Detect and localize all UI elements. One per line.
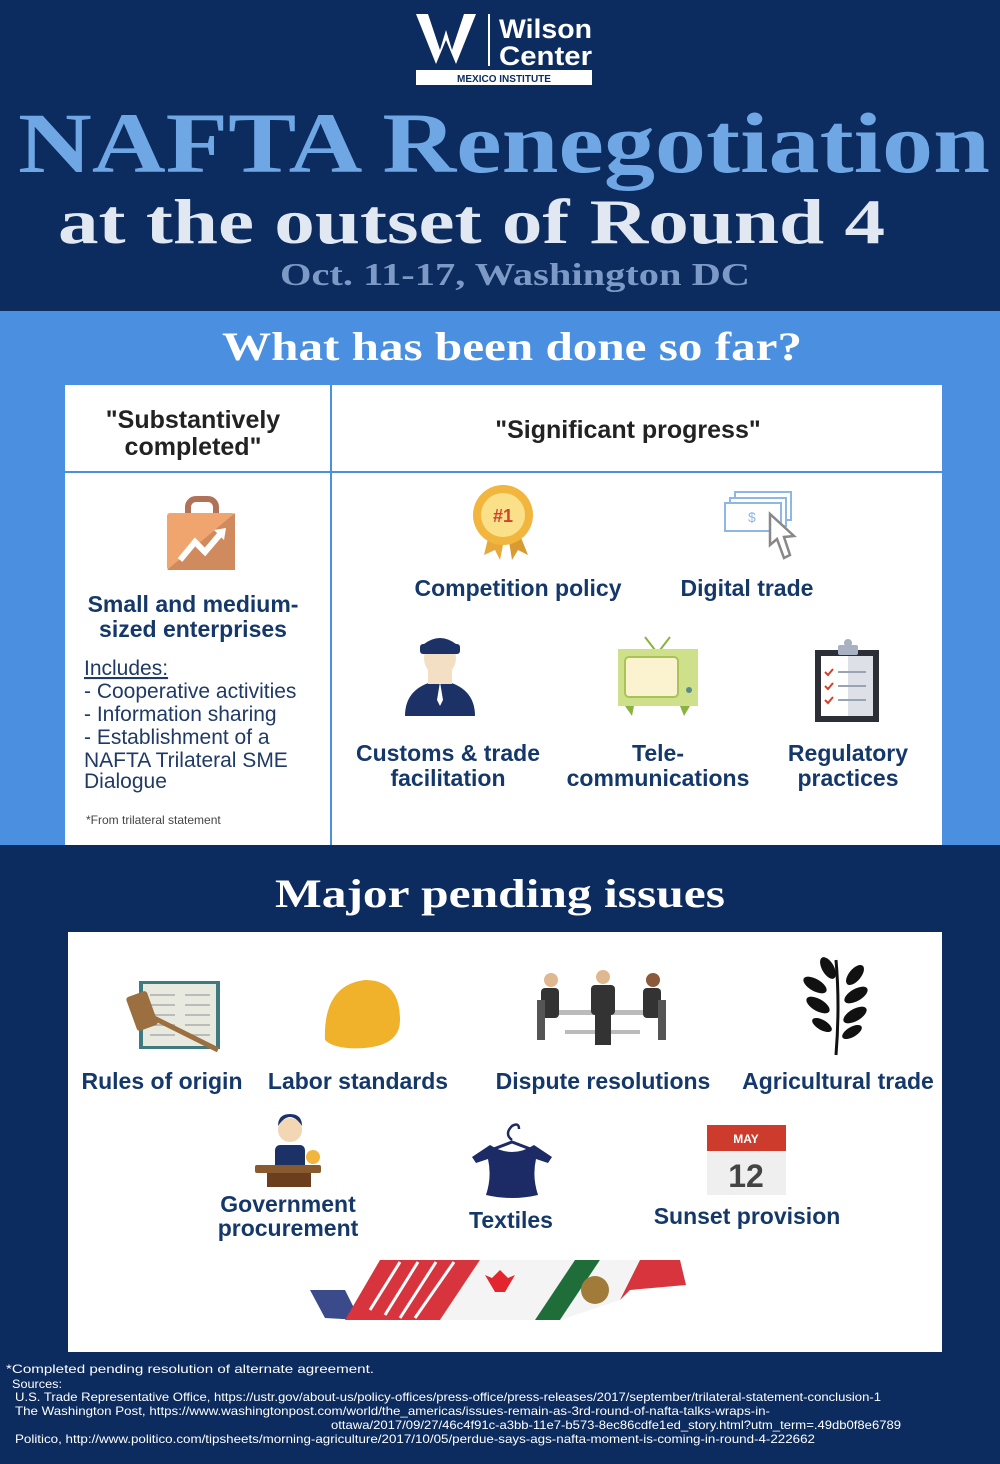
label: rules of origin: Rules of origin bbox=[82, 1068, 242, 1094]
footer: notes and sources: Sources: bbox=[12, 1377, 62, 1391]
logo: Wilson Center Mexico Institute: MEXICO INSTITUTE bbox=[457, 74, 551, 85]
label: sunset provision: Sunset provision bbox=[654, 1203, 840, 1229]
icon: meeting bbox=[537, 970, 666, 1045]
icon: hard hat bbox=[325, 980, 400, 1048]
footer: notes and sources: U.S. Trade Representative Office, https://ustr.gov/about-us/policy-offices/press-office/press-releases/2017/september/trilateral-statement-conclusion-1 bbox=[15, 1390, 881, 1404]
header: substantively completed: "Substantively bbox=[106, 406, 280, 434]
icon: briefcase bbox=[167, 499, 235, 570]
icon: digital money bbox=[725, 492, 794, 558]
label: textiles: Textiles bbox=[469, 1207, 553, 1233]
label: digital trade: Digital trade bbox=[681, 575, 813, 601]
icon: medal bbox=[473, 485, 533, 560]
text block: includes list: - Cooperative activities bbox=[84, 680, 296, 703]
label: government procurement: procurement bbox=[218, 1215, 359, 1241]
icon: plant bbox=[801, 955, 870, 1055]
panel: progress table bbox=[65, 385, 942, 845]
text block: includes list: Includes: bbox=[84, 657, 168, 680]
label: telecommunications: communications bbox=[567, 765, 749, 791]
label: regulatory practices: practices bbox=[797, 765, 899, 791]
icon: shirt on hanger bbox=[472, 1125, 552, 1198]
icon: medal: #1 bbox=[493, 506, 513, 526]
footer: notes and sources: The Washington Post, https://www.washingtonpost.com/world/the_americas/issues-remain-as-3rd-round-of-nafta-talks-wraps-in- bbox=[15, 1404, 770, 1418]
icon: clipboard bbox=[815, 639, 879, 722]
text block: includes list: - Information sharing bbox=[84, 703, 277, 726]
logo: Wilson Center Mexico Institute bbox=[416, 14, 593, 85]
footer: notes and sources: ottawa/2017/09/27/46c4f91c-a3bb-11e7-b573-8ec86cdfe1ed_story.html?utm_term=.49db0f8e6789 bbox=[331, 1418, 901, 1432]
icon: television bbox=[618, 637, 698, 716]
footer: notes and sources: Politico, http://www.politico.com/tipsheets/morning-agriculture/2017/10/05/perdue-says-ags-nafta-moment-is-coming-in-round-4-222662 bbox=[15, 1432, 815, 1446]
note: *From trilateral statement bbox=[86, 813, 221, 827]
icon: book and gavel bbox=[126, 981, 220, 1050]
logo: Wilson Center Mexico Institute: Center bbox=[499, 41, 593, 71]
footer: notes and sources: *Completed pending resolution of alternate agreement. bbox=[6, 1362, 374, 1376]
panel: pending issues bbox=[68, 932, 942, 1352]
label: labor standards: Labor standards bbox=[268, 1068, 448, 1094]
heading: major pending issues: Major pending issues bbox=[275, 871, 725, 916]
label: government procurement: Government bbox=[220, 1191, 356, 1217]
icon: calendar: MAY bbox=[733, 1132, 759, 1146]
label: competition policy: Competition policy bbox=[414, 575, 622, 601]
icon: podium speaker bbox=[255, 1114, 321, 1187]
icon: calendar bbox=[707, 1125, 786, 1195]
label: customs & trade facilitation: Customs & trade bbox=[356, 740, 540, 766]
text block: includes list: Dialogue bbox=[84, 770, 167, 793]
label: customs & trade facilitation: facilitation bbox=[390, 765, 506, 791]
icon: calendar: 12 bbox=[728, 1158, 764, 1194]
label: regulatory practices: Regulatory bbox=[788, 740, 908, 766]
date: Oct. 11-17, Washington DC bbox=[280, 256, 750, 292]
icon: flags ribbon bbox=[310, 1260, 686, 1320]
label: dispute resolutions: Dispute resolutions bbox=[496, 1068, 710, 1094]
subtitle: at the outset of Round 4 bbox=[58, 186, 885, 257]
heading: what has been done: What has been done so far? bbox=[222, 324, 802, 369]
text block: includes list: NAFTA Trilateral SME bbox=[84, 749, 288, 772]
logo: Wilson Center Mexico Institute: Wilson bbox=[499, 14, 592, 44]
header: significant progress: "Significant progress" bbox=[495, 416, 761, 444]
label: telecommunications: Tele- bbox=[632, 740, 684, 766]
text block: includes list: - Establishment of a bbox=[84, 726, 270, 749]
footer: notes and sources bbox=[6, 1362, 901, 1446]
label: SMEs: sized enterprises bbox=[99, 616, 287, 642]
header: substantively completed: completed" bbox=[125, 433, 261, 461]
label: SMEs: Small and medium- bbox=[88, 591, 298, 617]
section: what has been done so far bbox=[0, 311, 1000, 845]
icon: customs officer bbox=[405, 638, 475, 716]
title: NAFTA Renegotiation bbox=[18, 95, 990, 191]
label: agricultural trade: Agricultural trade bbox=[742, 1068, 934, 1094]
icon: digital money: $ bbox=[748, 509, 756, 525]
